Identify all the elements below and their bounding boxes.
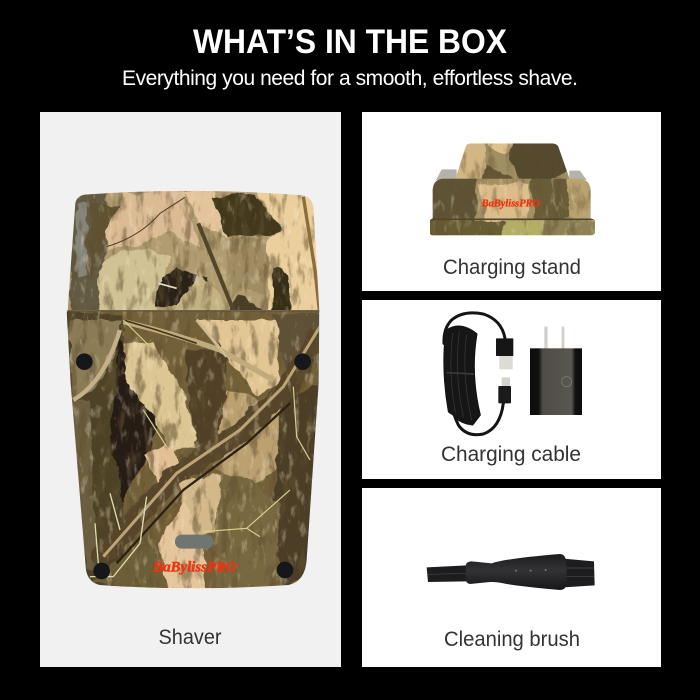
charge indicator (175, 535, 213, 549)
USB-A plug (496, 338, 513, 356)
stand illustration (430, 143, 595, 236)
stand base (430, 178, 595, 236)
shaver illustration (66, 190, 320, 588)
wall adapter (530, 348, 582, 415)
cable coil (444, 313, 505, 435)
USB-C plug (502, 377, 510, 386)
screws (76, 353, 311, 579)
panel: charging stand (362, 112, 661, 291)
brush illustration (427, 554, 595, 590)
cable illustration (444, 313, 582, 435)
metal contacts (436, 169, 587, 180)
label: cleaning brush: Cleaning brush (444, 628, 580, 651)
brand logo: BaBylissPRO (481, 199, 540, 210)
label: shaver: Shaver (158, 626, 222, 649)
wall adapter prongs (544, 327, 564, 349)
panel: cleaning brush (362, 488, 661, 667)
bristles left (427, 565, 467, 582)
stand upper (456, 143, 570, 179)
bristles right (563, 559, 595, 587)
label: charging stand: Charging stand (443, 256, 581, 279)
seam (67, 308, 319, 315)
shaver head (68, 190, 320, 310)
panel: shaver (40, 112, 341, 667)
subtitle: Everything you need for a smooth, effortless shave. (122, 67, 578, 90)
label: charging cable: Charging cable (441, 443, 581, 466)
panel: charging cable (362, 300, 661, 479)
brand logo: BaBylissPRO (152, 560, 237, 576)
shaver body (60, 308, 330, 595)
title: WHAT’S IN THE BOX (193, 23, 507, 61)
handle (466, 554, 567, 590)
